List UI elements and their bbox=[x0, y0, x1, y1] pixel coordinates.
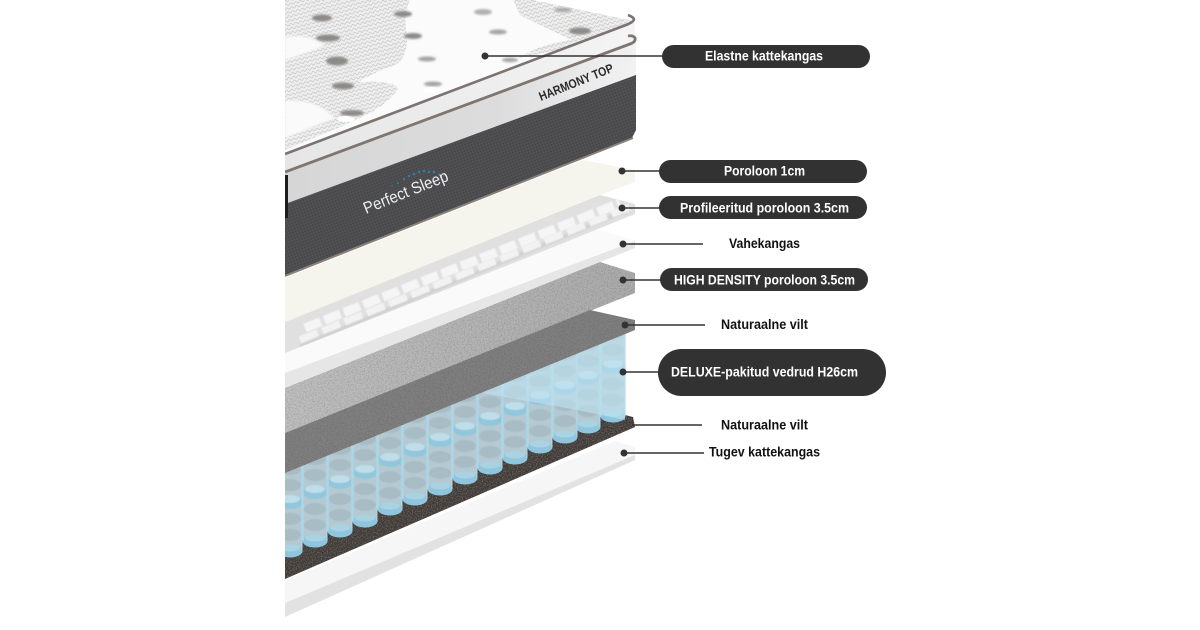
side grey band bbox=[285, 42, 636, 204]
lower piping bbox=[285, 36, 635, 172]
callout: HIGH DENSITY poroloon 3.5cm: HIGH DENSITY poroloon 3.5cm bbox=[674, 272, 855, 288]
layer: spacer fabric bbox=[285, 230, 635, 388]
callout: Elastne kattekangas: Elastne kattekangas bbox=[705, 48, 823, 64]
layer: pocket springs bbox=[285, 334, 626, 558]
tufted dimples bbox=[312, 8, 591, 122]
upper piping bbox=[285, 15, 634, 154]
layer: base fabric bbox=[285, 441, 635, 617]
callout: DELUXE-pakitud vedrud H26cm bbox=[620, 349, 886, 396]
layer: natural felt upper bbox=[285, 310, 635, 473]
callout: Poroloon 1cm: Poroloon 1cm bbox=[724, 164, 805, 178]
bottom piping bbox=[285, 138, 633, 276]
side tag bbox=[285, 175, 288, 218]
callout: Tugev kattekangas bbox=[620, 444, 820, 460]
dark side panel bbox=[285, 75, 636, 275]
callout: Elastne kattekangas bbox=[482, 45, 870, 68]
callout: Naturaalne vilt (upper) bbox=[622, 317, 808, 332]
layer: natural felt lower bbox=[285, 405, 635, 579]
callout: HIGH DENSITY poroloon 3.5cm bbox=[620, 268, 868, 291]
layer: foam 1cm bbox=[285, 160, 635, 322]
callout: Vahekangas bbox=[620, 236, 800, 251]
callout: DELUXE-pakitud vedrud H26cm: DELUXE-pakitud vedrud H26cm bbox=[671, 364, 858, 380]
callout: Vahekangas: Vahekangas bbox=[729, 236, 800, 251]
callout: Tugev kattekangas: Tugev kattekangas bbox=[709, 444, 820, 460]
callout: Profileeritud poroloon 3.5cm bbox=[618, 196, 867, 219]
callout: Naturaalne vilt (upper): Naturaalne vilt bbox=[721, 317, 808, 332]
brand text: HARMONY TOP: HARMONY TOP bbox=[537, 61, 615, 104]
brand logo: Perfect Sleep: Perfect Sleep bbox=[361, 167, 451, 218]
callout: Poroloon 1cm bbox=[618, 160, 867, 183]
callout: Profileeritud poroloon 3.5cm: Profileeritud poroloon 3.5cm bbox=[680, 200, 849, 216]
top quilted surface bbox=[285, 0, 634, 153]
callout: Naturaalne vilt (lower): Naturaalne vilt bbox=[721, 418, 808, 432]
side white band between pipings bbox=[285, 21, 636, 172]
mattress layer illustration bbox=[278, 0, 636, 617]
layer: profiled foam bbox=[285, 195, 635, 356]
layer: high density foam bbox=[285, 262, 635, 433]
